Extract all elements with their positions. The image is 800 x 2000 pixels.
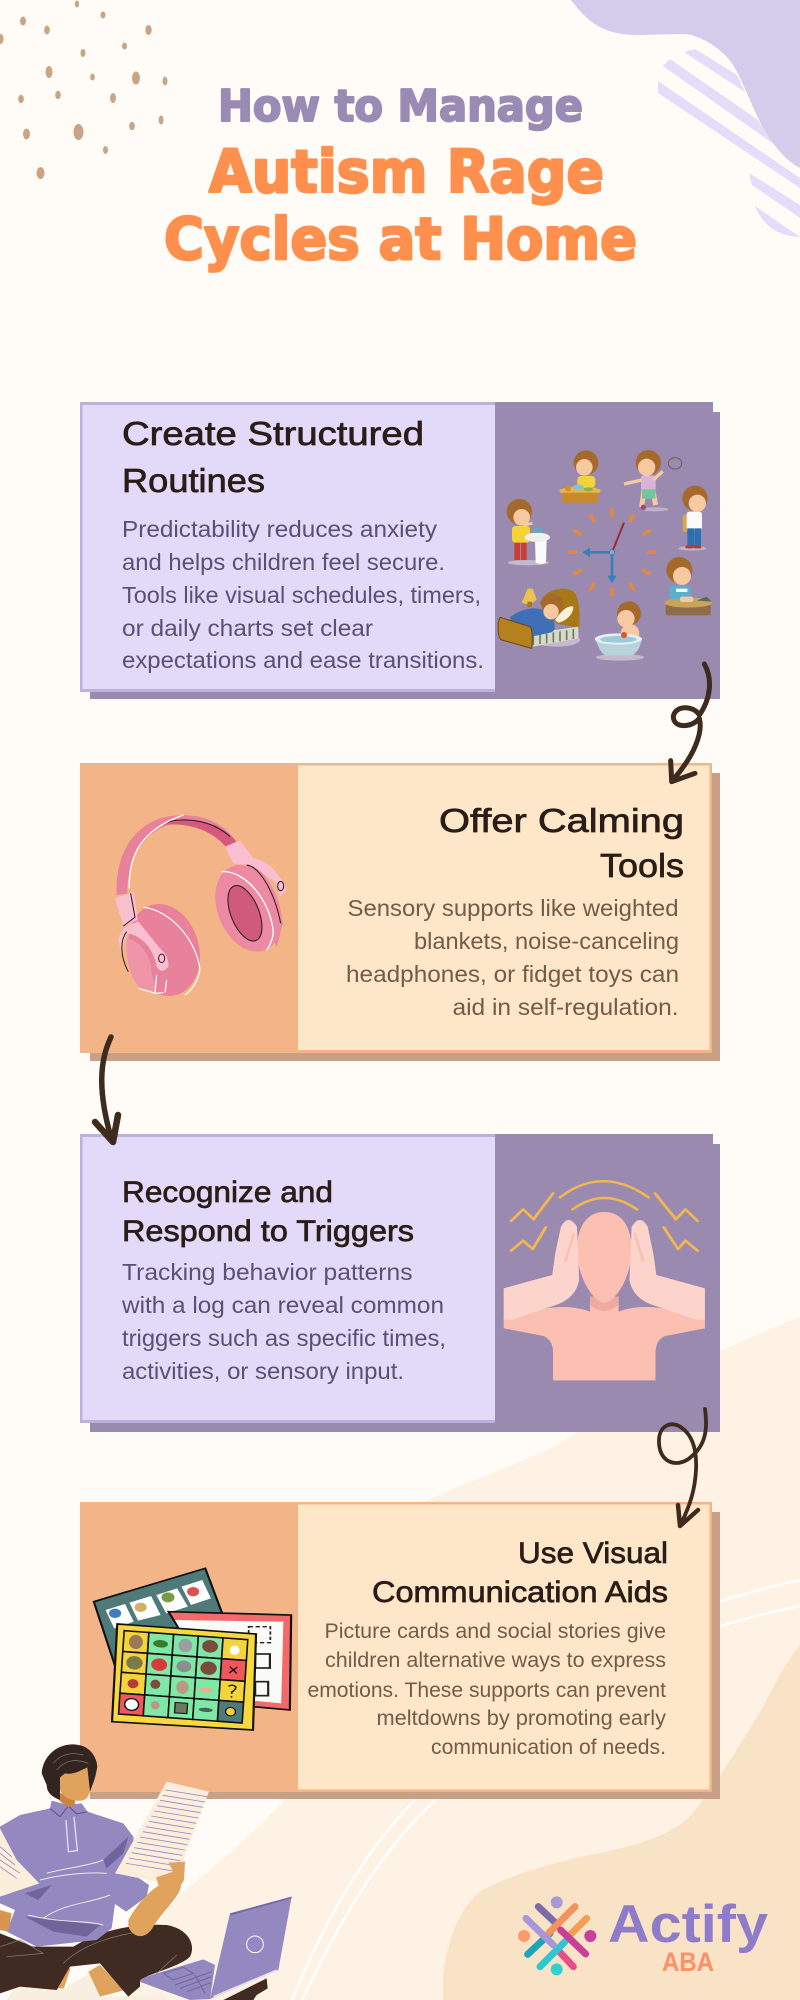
logo wordmark: Actify <box>608 1895 769 1954</box>
text: routines description: Predictability reduces anxiety <box>122 516 438 542</box>
icon: pink headphones <box>115 815 294 1004</box>
title: How to Manage <box>218 81 583 132</box>
text: triggers description: with a log can reveal common <box>121 1292 444 1318</box>
pink card <box>168 1612 291 1710</box>
icon: person covering ears <box>504 1181 705 1380</box>
decoration: lilac blob top right <box>571 0 800 168</box>
decoration: peach blob bottom right <box>443 1645 800 2000</box>
right paper with lines <box>115 1782 209 1885</box>
right arm <box>128 1883 181 1936</box>
title <box>164 81 637 273</box>
panel: use visual communication aids <box>80 1502 720 1799</box>
logo: Actify ABA <box>518 1895 769 1977</box>
text: routines description: Tools like visual schedules, timers, <box>122 582 481 608</box>
heading: offer calming tools: Tools <box>600 847 684 884</box>
panel: offer calming tools <box>80 763 720 1061</box>
text: visual aids description <box>308 1620 667 1759</box>
head and hair <box>42 1744 97 1807</box>
text: calming tools description: Sensory supports like weighted <box>348 895 678 921</box>
clock face <box>568 508 656 597</box>
text: calming tools description: aid in self-regulation. <box>452 994 678 1020</box>
decoration: brown dots top left <box>0 0 168 179</box>
laptop <box>135 1897 292 2000</box>
left paper <box>0 1828 39 1932</box>
text: visual aids description: meltdowns by promoting early <box>376 1707 667 1730</box>
heading: recognize and respond to triggers: Respond to Triggers <box>122 1215 414 1248</box>
text: triggers description: triggers such as specific times, <box>122 1325 446 1351</box>
icon: clock with daily routine children <box>498 450 712 661</box>
heading: create structured routines <box>122 415 424 499</box>
child sleeping in bed <box>498 589 580 648</box>
panel: create structured routines <box>80 402 720 699</box>
text: routines description <box>122 516 484 673</box>
heading: offer calming tools <box>439 802 684 884</box>
text: visual aids description: children alternative ways to express <box>325 1649 666 1672</box>
text: visual aids description: communication of needs. <box>431 1736 666 1759</box>
heading: use visual communication aids <box>372 1537 668 1609</box>
yellow card with symbol grid <box>112 1624 256 1730</box>
heading: create structured routines: Routines <box>122 462 265 499</box>
icon: picture communication cards <box>94 1568 291 1730</box>
text: calming tools description: headphones, or fidget toys can <box>346 961 679 987</box>
text: calming tools description: blankets, noise-canceling <box>414 928 679 954</box>
heading: recognize and respond to triggers <box>122 1176 414 1248</box>
child at sink <box>507 499 550 565</box>
arrow: triggers to visual aids <box>659 1409 706 1526</box>
legs and trousers <box>0 1925 192 2000</box>
logo subtitle: ABA <box>662 1947 714 1977</box>
text: routines description: expectations and ease transitions. <box>122 647 484 673</box>
panel: recognize and respond to triggers <box>80 1134 720 1432</box>
title: Cycles at Home <box>164 205 637 273</box>
text: triggers description: Tracking behavior patterns <box>122 1259 412 1285</box>
text: calming tools description <box>346 895 679 1020</box>
text: visual aids description: emotions. These supports can prevent <box>308 1679 666 1702</box>
text: visual aids description: Picture cards and social stories give <box>324 1620 666 1643</box>
shirt <box>0 1801 149 1947</box>
title: Autism Rage <box>209 137 604 206</box>
heading: use visual communication aids: Communication Aids <box>372 1576 668 1609</box>
child at desk <box>664 557 712 615</box>
child eating <box>559 450 601 503</box>
heading: offer calming tools: Offer Calming <box>439 802 684 839</box>
text: triggers description <box>121 1259 446 1384</box>
child with backpack <box>678 486 708 551</box>
logo mark <box>518 1896 596 1975</box>
hand <box>156 1862 185 1889</box>
text: routines description: and helps children feel secure. <box>122 549 445 575</box>
decoration: white curved lines <box>292 1580 800 2000</box>
child with racket <box>624 450 682 511</box>
decoration: lilac stripes top right <box>658 49 800 237</box>
heading: use visual communication aids: Use Visual <box>518 1537 668 1570</box>
arrow: calming tools to triggers <box>95 1037 118 1142</box>
arrow: routines to calming tools <box>671 664 710 782</box>
back teal card <box>94 1568 233 1670</box>
heading: recognize and respond to triggers: Recognize and <box>122 1176 333 1209</box>
illustration: person reading papers with laptop <box>0 1744 292 2000</box>
heading: create structured routines: Create Structured <box>122 415 424 452</box>
child in bath <box>595 601 644 661</box>
text: triggers description: activities, or sensory input. <box>122 1358 404 1384</box>
text: routines description: or daily charts set clear <box>122 615 373 641</box>
decoration: pale cream blob bottom <box>130 1317 800 2000</box>
